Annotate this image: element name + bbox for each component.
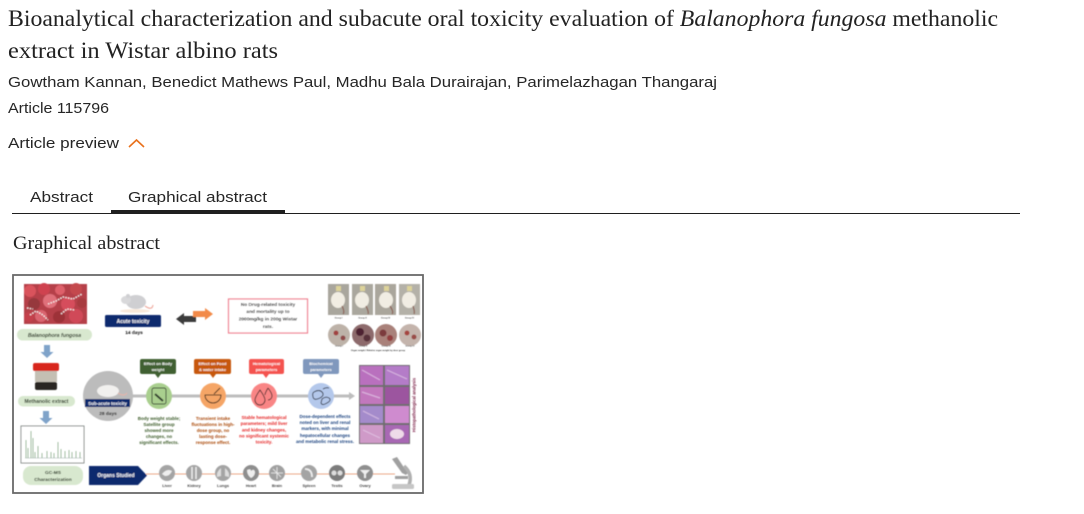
histology panels <box>359 365 410 444</box>
article preview toggle: Article preview <box>8 135 119 152</box>
hematological effect: and kidney changes, <box>242 428 286 432</box>
photos: organ plates: Group III <box>382 346 391 348</box>
arrow down <box>40 411 52 424</box>
section heading: Graphical abstract <box>13 233 161 254</box>
callout: no drug-related toxicity: rats. <box>263 324 273 330</box>
body weight effect: significant effects. <box>139 440 179 445</box>
photos: organ plates <box>328 324 421 352</box>
label: acute toxicity: Acute toxicity <box>117 319 150 325</box>
food and water intake effect: Effect on Food <box>198 361 227 366</box>
hematological effect: Hematological <box>253 361 280 366</box>
callout: no drug-related toxicity: and mortality up to <box>246 309 290 315</box>
body weight effect: Effect on Body <box>144 361 173 366</box>
body weight effect: Body weight stable; <box>138 416 181 421</box>
body weight effect: Satellite group <box>143 422 175 427</box>
food and water intake effect: lasting dose- <box>199 434 227 439</box>
organ labels <box>162 483 371 488</box>
article title: Bioanalytical characterization and subacute oral toxicity evaluation of Balanophora fungosa methanolic <box>8 6 998 31</box>
label: acute toxicity <box>105 315 161 336</box>
food and water intake effect: Transient intake <box>196 416 231 421</box>
hematological effect: parameters <box>256 367 278 372</box>
sub-acute toxicity circle: 28 days <box>99 411 117 417</box>
body weight effect <box>138 359 181 445</box>
callout: no drug-related toxicity: 2000mg/kg in 200g Wistar <box>239 316 297 322</box>
organ icons <box>159 465 373 481</box>
label: GC-MS characterization: Characterization <box>34 477 72 483</box>
photos: organ plates: Organ weight / Relative organ weight by dose group <box>351 349 406 352</box>
body weight effect: showed more <box>144 428 174 433</box>
label: GC-MS characterization <box>23 466 83 485</box>
label: methanolic extract: Methanolic extract <box>25 399 69 405</box>
icon: microscope <box>392 457 414 489</box>
photos: organ plates: Group IV <box>405 346 415 348</box>
arrow down <box>40 345 54 358</box>
organ labels: Liver <box>162 483 172 488</box>
photos: organ plates: Group II <box>359 346 368 348</box>
article title <box>8 6 998 63</box>
body weight effect: changes, no <box>146 434 172 439</box>
organ labels: Testis <box>331 483 343 488</box>
hematological effect <box>239 359 289 444</box>
tabs: Graphical abstract <box>128 189 268 206</box>
icon: extract jar <box>33 363 59 390</box>
biochemical effect: markers, with minimal <box>301 426 349 431</box>
label: Balanophora fungosa: Balanophora fungosa <box>28 333 81 339</box>
biochemical effect: hepatocellular changes <box>300 433 350 438</box>
authors: Gowtham Kannan, Benedict Mathews Paul, Madhu Bala Durairajan, Parimelazhagan Thangaraj <box>8 74 717 91</box>
label: acute toxicity: 14 days <box>125 330 143 336</box>
organ labels: Brain <box>272 483 283 488</box>
tabs <box>12 189 1020 214</box>
vertical label: histopathological analysis: Histopathological analysis <box>412 377 416 432</box>
callout: no drug-related toxicity: No Drug-related toxicity <box>241 302 296 308</box>
biochemical effect: and metabolic renal stress. <box>296 439 354 444</box>
organ labels: Kidney <box>187 483 201 488</box>
banner: organs studied: Organs Studied <box>97 473 135 479</box>
food and water intake effect: & water intake <box>199 367 227 372</box>
article title: extract in Wistar albino rats <box>8 38 278 63</box>
article number: Article 115796 <box>8 100 109 117</box>
label: GC-MS characterization: GC-MS <box>45 470 62 476</box>
hematological effect: Stable hematological <box>241 415 287 420</box>
food and water intake effect: fluctuations in high- <box>192 422 235 427</box>
food and water intake effect: response effect. <box>196 440 230 445</box>
callout: no drug-related toxicity <box>228 299 308 333</box>
hematological effect: toxicity. <box>256 440 272 444</box>
label: methanolic extract <box>18 396 75 406</box>
label: Balanophora fungosa <box>17 329 92 340</box>
hematological effect: parameters; mild liver <box>241 421 288 426</box>
photos: rats by group: Group III <box>381 318 390 320</box>
photos: rats by group: Group I <box>335 318 343 320</box>
body weight effect: weight <box>151 367 165 372</box>
arrow: orange <box>193 308 213 320</box>
arrow: black <box>176 313 196 325</box>
organs connector <box>146 473 395 475</box>
biochemical effect: parameters <box>310 367 333 372</box>
biochemical effect: noted on liver and renal <box>300 420 350 425</box>
organ labels: Spleen <box>302 483 316 488</box>
photos: rats by group <box>328 284 420 320</box>
biochemical effect <box>296 359 354 444</box>
food and water intake effect <box>192 359 235 445</box>
hematological effect: no significant systemic <box>239 434 289 438</box>
sub-acute toxicity circle <box>83 371 133 421</box>
photos: organ plates: Group I <box>335 346 343 348</box>
organ labels: Lungs <box>217 483 230 488</box>
sub-acute toxicity circle: Sub-acute toxicity <box>88 401 127 406</box>
chart: GC-MS chromatogram <box>21 426 84 463</box>
food and water intake effect: dose group, no <box>197 428 229 433</box>
icon: rat, acute <box>120 294 153 313</box>
timeline connector with arrow <box>120 392 355 400</box>
photo: Balanophora fungosa <box>24 283 87 324</box>
banner: organs studied <box>89 466 147 485</box>
biochemical effect: Dose-dependent effects <box>299 414 351 419</box>
organ labels: Heart <box>246 483 257 488</box>
organ labels: Ovary <box>359 483 371 488</box>
biochemical effect: Biochemical <box>309 361 333 366</box>
photos: rats by group: Group II <box>358 318 367 320</box>
tabs: Abstract <box>30 189 94 206</box>
graphical abstract image <box>13 275 423 493</box>
photos: rats by group: Group IV <box>405 318 415 320</box>
